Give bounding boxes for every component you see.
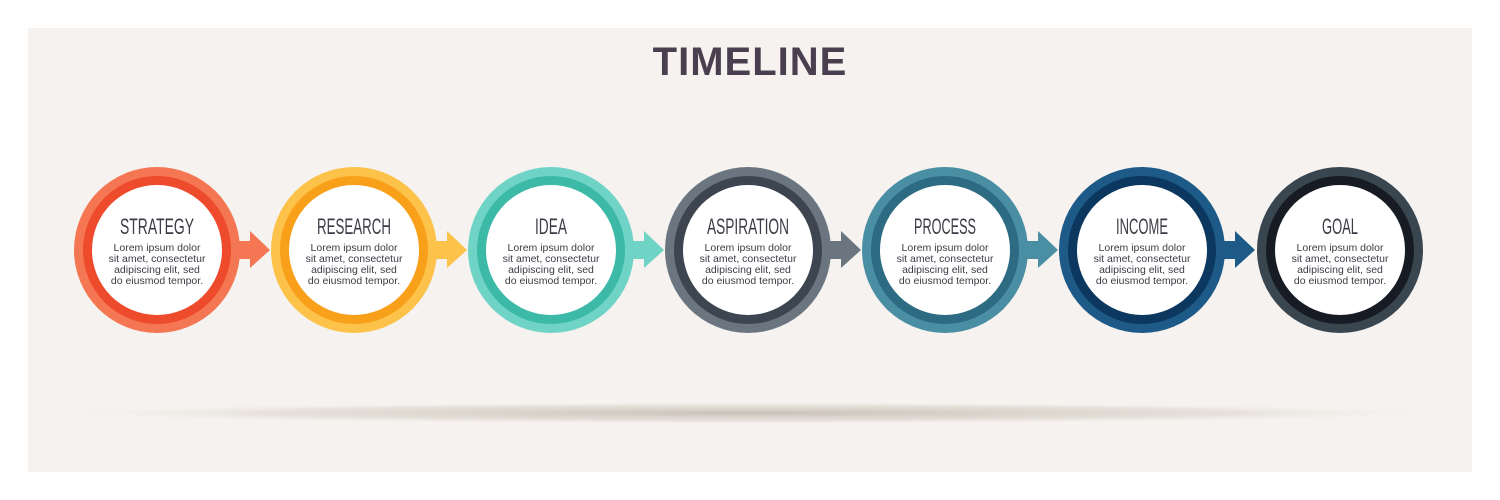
step 3: idea: do eiusmod tempor. bbox=[505, 275, 597, 287]
step 5: process bbox=[862, 167, 1058, 333]
step 2: research: RESEARCH bbox=[317, 214, 391, 239]
step 4: aspiration: Lorem ipsum dolor bbox=[705, 242, 792, 254]
step 6: income: INCOME bbox=[1116, 214, 1168, 239]
step 4: aspiration bbox=[665, 167, 861, 333]
step 7: goal: adipiscing elit, sed bbox=[1297, 264, 1383, 276]
step 5: process: Lorem ipsum dolor bbox=[902, 242, 989, 254]
step 6: income bbox=[1059, 167, 1255, 333]
floor shadow bbox=[50, 402, 1450, 424]
step 7: goal: Lorem ipsum dolor bbox=[1297, 242, 1384, 254]
step 6: income: adipiscing elit, sed bbox=[1099, 264, 1185, 276]
step 1: strategy: adipiscing elit, sed bbox=[114, 264, 200, 276]
step 7: goal bbox=[1257, 167, 1423, 333]
step 6: income: Lorem ipsum dolor bbox=[1099, 242, 1186, 254]
step 5: process: adipiscing elit, sed bbox=[902, 264, 988, 276]
step 6: income: do eiusmod tempor. bbox=[1096, 275, 1188, 287]
step 1: strategy: do eiusmod tempor. bbox=[111, 275, 203, 287]
step 7: goal: sit amet, consectetur bbox=[1292, 253, 1389, 265]
step 6: income: sit amet, consectetur bbox=[1094, 253, 1191, 265]
step 1: strategy: STRATEGY bbox=[120, 214, 194, 239]
step 2: research: adipiscing elit, sed bbox=[311, 264, 397, 276]
step 1: strategy: sit amet, consectetur bbox=[109, 253, 206, 265]
step 2: research bbox=[271, 167, 467, 333]
step 1: strategy: Lorem ipsum dolor bbox=[114, 242, 201, 254]
step 7: goal: do eiusmod tempor. bbox=[1294, 275, 1386, 287]
step 2: research: Lorem ipsum dolor bbox=[311, 242, 398, 254]
step 4: aspiration: ASPIRATION bbox=[707, 214, 789, 239]
step 3: idea: Lorem ipsum dolor bbox=[508, 242, 595, 254]
step 4: aspiration: adipiscing elit, sed bbox=[705, 264, 791, 276]
step 3: idea: IDEA bbox=[535, 214, 567, 239]
step 3: idea: adipiscing elit, sed bbox=[508, 264, 594, 276]
step 1: strategy bbox=[74, 167, 270, 333]
step 5: process: sit amet, consectetur bbox=[897, 253, 994, 265]
title: TIMELINE bbox=[653, 40, 847, 84]
step 3: idea: sit amet, consectetur bbox=[503, 253, 600, 265]
step 4: aspiration: do eiusmod tempor. bbox=[702, 275, 794, 287]
step 4: aspiration: sit amet, consectetur bbox=[700, 253, 797, 265]
step 7: goal: GOAL bbox=[1322, 214, 1358, 239]
step 5: process: PROCESS bbox=[914, 214, 976, 239]
step 5: process: do eiusmod tempor. bbox=[899, 275, 991, 287]
step 2: research: do eiusmod tempor. bbox=[308, 275, 400, 287]
step 3: idea bbox=[468, 167, 664, 333]
step 2: research: sit amet, consectetur bbox=[306, 253, 403, 265]
